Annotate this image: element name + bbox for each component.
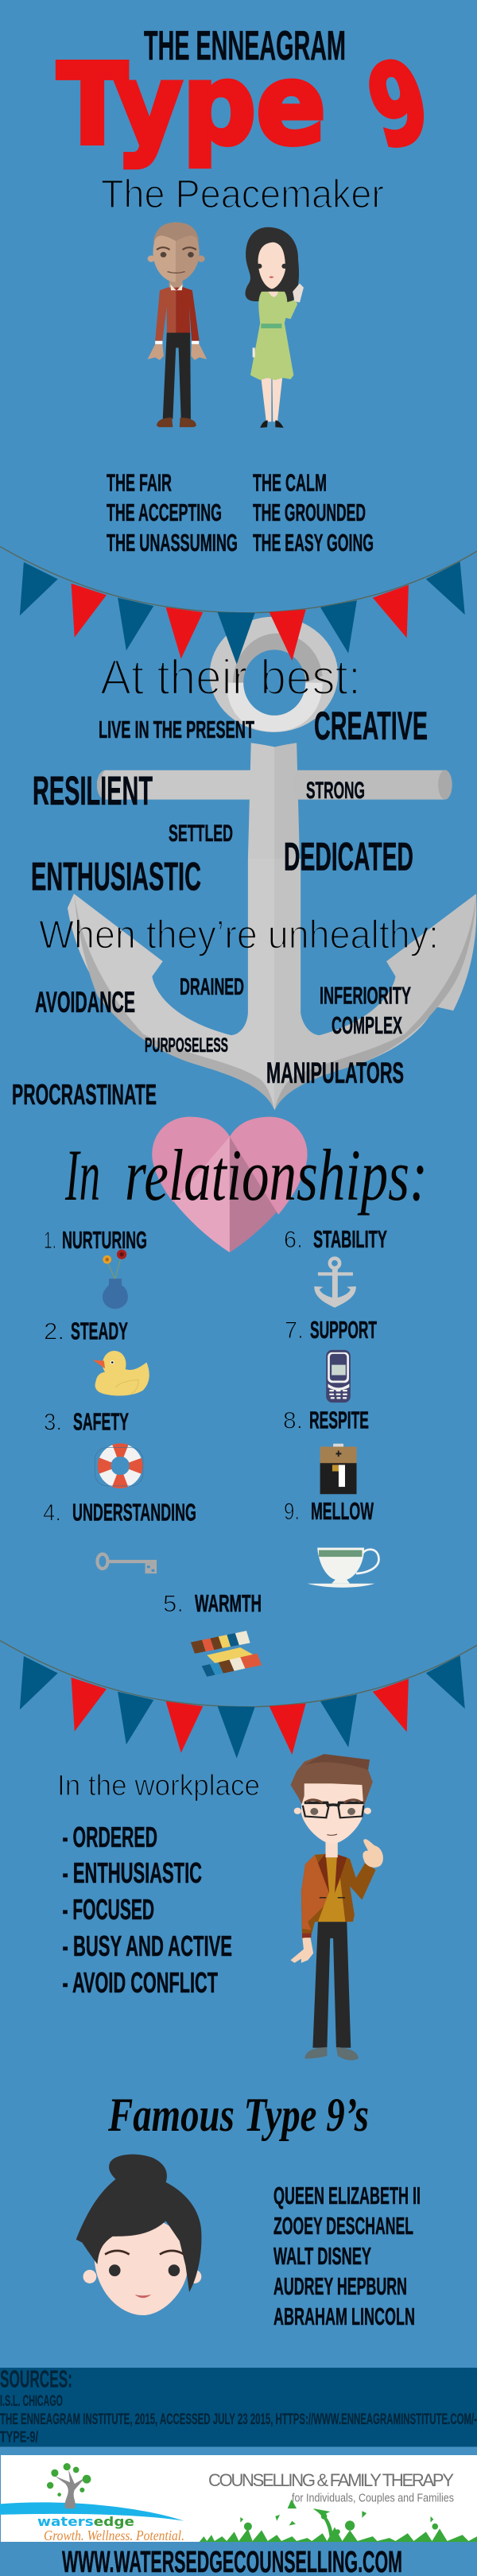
list: workplace traits: - ENTHUSIASTIC (62, 1856, 202, 1889)
panel: sources: SOURCES: (0, 2365, 72, 2393)
traits list: THE EASY GOING (253, 529, 374, 557)
panel: Watersedge logo banner: waters edge (37, 2514, 134, 2529)
list: workplace traits: - ORDERED (62, 1821, 157, 1853)
list: relationship qualities: STEADY (71, 1317, 128, 1345)
traits list: THE GROUNDED (253, 499, 366, 526)
illustration: man with glasses (290, 1754, 383, 2060)
icon: lifebuoy (95, 1448, 143, 1486)
illustration: man (148, 223, 207, 427)
best traits: SETTLED (169, 821, 233, 847)
list: workplace traits: - AVOID CONFLICT (62, 1966, 218, 1999)
traits list: THE CALM (253, 469, 327, 496)
unhealthy traits: COMPLEX (332, 1011, 402, 1039)
unhealthy traits: INFERIORITY (320, 981, 411, 1010)
icon: battery (320, 1444, 357, 1494)
list: relationship qualities: MELLOW (311, 1497, 374, 1525)
icon: striped scarf (191, 1631, 262, 1677)
panel: sources (0, 2365, 477, 2447)
traits list: THE ACCEPTING (107, 499, 222, 526)
list: relationship qualities: 1. (44, 1228, 56, 1254)
list: relationship qualities: NURTURING (62, 1226, 147, 1254)
list: relationship qualities: 8. (283, 1407, 303, 1434)
heading: Famous Type 9's: Famous Type 9’s (107, 2089, 369, 2141)
icon: key (97, 1554, 157, 1573)
panel: sources: I.S.L. CHICAGO (0, 2393, 63, 2410)
unhealthy traits: PROCRASTINATE (12, 1078, 157, 1111)
best traits: ENTHUSIASTIC (31, 854, 201, 898)
list: workplace traits: - BUSY AND ACTIVE (62, 1930, 232, 1962)
title: Type 9: Type (57, 41, 326, 170)
best traits: LIVE IN THE PRESENT (99, 716, 254, 743)
unhealthy traits: AVOIDANCE (35, 986, 135, 1018)
list: relationship qualities: RESPITE (309, 1406, 369, 1434)
illustration: woman's head (76, 2155, 201, 2315)
list: relationship qualities: 2. (44, 1318, 64, 1345)
heading: At their best: At their best: (100, 650, 361, 705)
title: Type 9: 9 (356, 36, 442, 175)
icon: small anchor (314, 1256, 356, 1308)
illustration: large anchor (68, 617, 476, 1110)
list: relationship qualities: STABILITY (313, 1225, 387, 1253)
list: relationship qualities: 3. (44, 1409, 62, 1436)
list: relationship qualities: 4. (43, 1499, 61, 1527)
list: famous names: WALT DISNEY (273, 2242, 371, 2270)
green plants (200, 2499, 477, 2542)
icon: tea cup (308, 1548, 378, 1588)
heading: When they're unhealthy: When they’re unhealthy: (39, 913, 439, 957)
illustration: pink heart (152, 1117, 308, 1252)
list: relationship qualities (43, 1225, 387, 1617)
unhealthy traits: DRAINED (180, 974, 244, 1000)
list: workplace traits: - FOCUSED (62, 1893, 154, 1926)
list: workplace traits (62, 1821, 232, 1999)
unhealthy traits (12, 974, 411, 1111)
list: relationship qualities: 5. (163, 1591, 184, 1617)
panel: Watersedge logo banner: Growth. Wellness. Potential. (44, 2528, 184, 2543)
icon: vase with flowers (103, 1250, 128, 1309)
list: relationship qualities: WARMTH (195, 1589, 262, 1617)
list: famous names (273, 2182, 421, 2330)
icon: mobile phone (326, 1350, 351, 1402)
list: relationship qualities: UNDERSTANDING (72, 1498, 196, 1527)
best traits: RESILIENT (33, 768, 153, 813)
icon: rubber duck (93, 1351, 149, 1395)
list: relationship qualities: 7. (285, 1317, 304, 1344)
list: relationship qualities: SAFETY (73, 1407, 129, 1436)
list: relationship qualities: 9. (284, 1499, 300, 1525)
panel: Watersedge logo banner (0, 2455, 477, 2543)
traits list: THE UNASSUMING (107, 529, 238, 557)
bunting bottom (0, 1640, 477, 1758)
bunting top (0, 546, 477, 664)
heading: In relationships: In (64, 1135, 100, 1216)
panel: Watersedge logo banner: COUNSELLING & FAMILY THERAPY (208, 2470, 454, 2490)
list: relationship qualities: 6. (284, 1227, 303, 1253)
traits list (107, 469, 374, 557)
best traits (31, 704, 428, 898)
subtitle: The Peacemaker: The Peacemaker (101, 172, 384, 216)
heading: In the workplace: In the workplace (57, 1769, 260, 1802)
illustration: woman (246, 227, 304, 428)
best traits: STRONG (306, 778, 365, 804)
unhealthy traits: PURPOSELESS (145, 1034, 228, 1057)
panel: sources: TYPE-9/ (0, 2430, 38, 2446)
traits list: THE FAIR (107, 469, 172, 496)
list: relationship qualities: SUPPORT (310, 1316, 377, 1344)
